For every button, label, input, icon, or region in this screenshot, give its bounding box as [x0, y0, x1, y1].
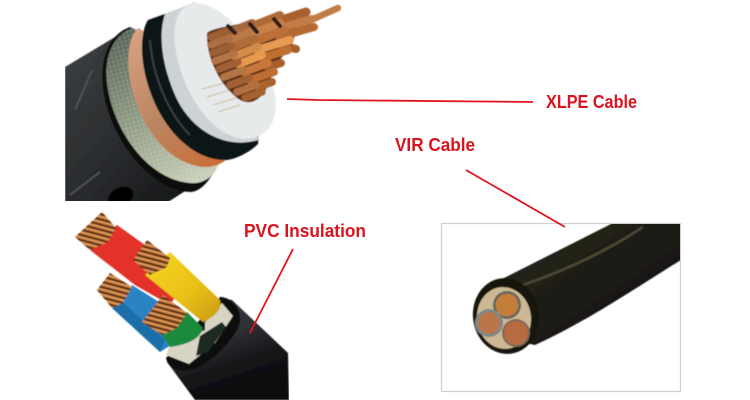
photo frame: VIR cable [442, 224, 680, 392]
outer jacket [65, 28, 215, 202]
end face filler [476, 286, 532, 350]
blue core [112, 285, 176, 352]
label: XLPE Cable: XLPE Cable [546, 92, 637, 112]
highlight streak [523, 227, 643, 285]
strand joints [228, 19, 280, 33]
copper tape [128, 28, 227, 168]
green mesh layer [105, 27, 218, 184]
silver filler [166, 303, 233, 364]
white insulation face [174, 3, 276, 139]
copper conductor [207, 8, 338, 102]
cable body [500, 223, 681, 345]
jacket rim [166, 297, 240, 370]
end face rim [472, 277, 539, 355]
conductor top [493, 291, 521, 319]
copper core: green [142, 295, 187, 335]
copper core: red [75, 212, 116, 250]
red core [90, 225, 180, 305]
core shadow [207, 16, 298, 102]
insulation streaks [202, 81, 242, 112]
conductor right [502, 319, 530, 347]
white insulation side [162, 2, 262, 143]
copper core: blue [97, 273, 132, 308]
conductor left [475, 309, 503, 337]
copper core: yellow [133, 240, 170, 275]
leader line: XLPE [287, 99, 533, 102]
black rim [102, 26, 212, 193]
photo: VIR cable [468, 223, 681, 358]
jacket [167, 298, 289, 400]
green core [162, 312, 203, 347]
label: VIR Cable: VIR Cable [395, 135, 475, 155]
black inner sheath [142, 5, 262, 160]
leader line: PVC [250, 249, 293, 333]
photo: XLPE cable [65, 2, 338, 202]
leader line: VIR [466, 170, 565, 227]
label: PVC Insulation: PVC Insulation [244, 221, 366, 241]
yellow core [145, 252, 220, 322]
photo: PVC insulated cable [75, 212, 289, 400]
